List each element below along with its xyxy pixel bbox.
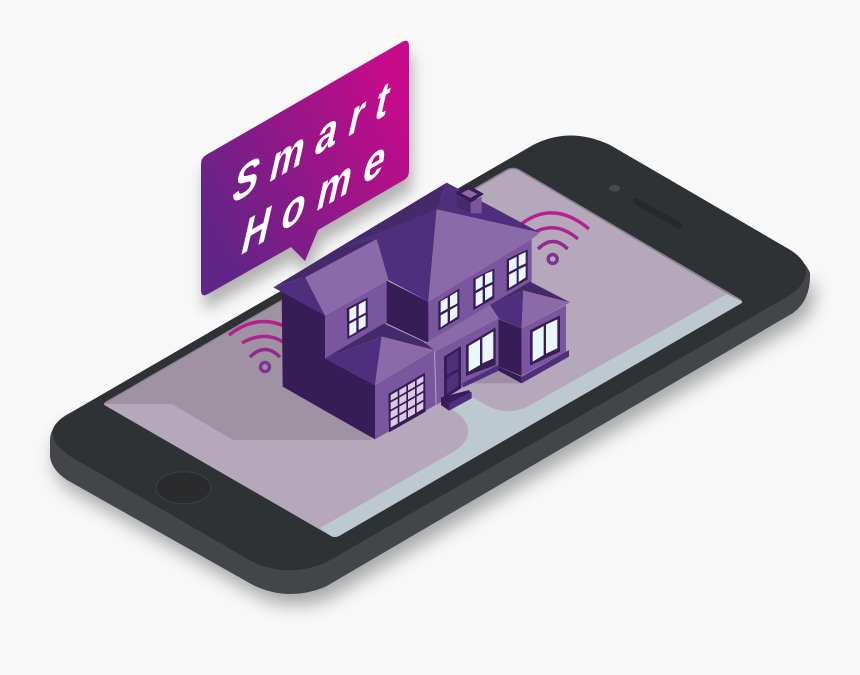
phone — [50, 136, 815, 605]
road and driveway — [320, 294, 742, 537]
porch roof — [425, 305, 498, 352]
main roof side slope — [335, 209, 437, 302]
main roof rear slope — [437, 183, 540, 233]
house cast shadow — [104, 300, 372, 440]
speaker — [636, 202, 679, 226]
upper windows — [438, 249, 528, 331]
chimney — [455, 185, 484, 213]
garage door — [388, 373, 426, 432]
garage roof — [325, 323, 434, 385]
front step — [441, 390, 472, 411]
left roof front — [305, 239, 388, 316]
bubble text: Home — [236, 119, 405, 268]
lawn — [104, 168, 742, 537]
wifi signal: right — [520, 213, 589, 264]
porch wall — [435, 318, 498, 405]
left upper wall — [325, 280, 388, 358]
phone drop shadow — [55, 284, 815, 605]
left side wall — [282, 277, 375, 439]
screen top edge shade — [105, 168, 741, 403]
wifi signal: left — [229, 321, 301, 372]
garage wall — [375, 350, 436, 439]
bay window shadow — [460, 367, 522, 383]
bay window — [530, 315, 560, 366]
bay right wall — [522, 305, 566, 376]
camera — [609, 185, 620, 192]
main upper wall — [428, 239, 532, 343]
recessed wall — [387, 281, 429, 343]
house — [273, 183, 570, 439]
bay roof — [490, 282, 570, 328]
door — [444, 346, 461, 398]
bubble body — [201, 41, 409, 295]
bubble shadow — [204, 54, 412, 308]
left roof end — [273, 277, 325, 316]
bay left wall — [498, 319, 522, 376]
bubble text: Smart — [227, 61, 408, 217]
phone screen — [104, 168, 742, 537]
home button — [156, 472, 211, 504]
left upper window — [347, 297, 368, 339]
main roof front slope — [428, 209, 540, 302]
phone side edge — [50, 248, 810, 594]
porch plinth — [462, 365, 499, 387]
bay plinth — [498, 350, 569, 383]
large porch window — [466, 327, 496, 376]
phone front face — [52, 136, 806, 570]
speech bubble — [201, 41, 412, 308]
back roof strip — [273, 183, 447, 287]
